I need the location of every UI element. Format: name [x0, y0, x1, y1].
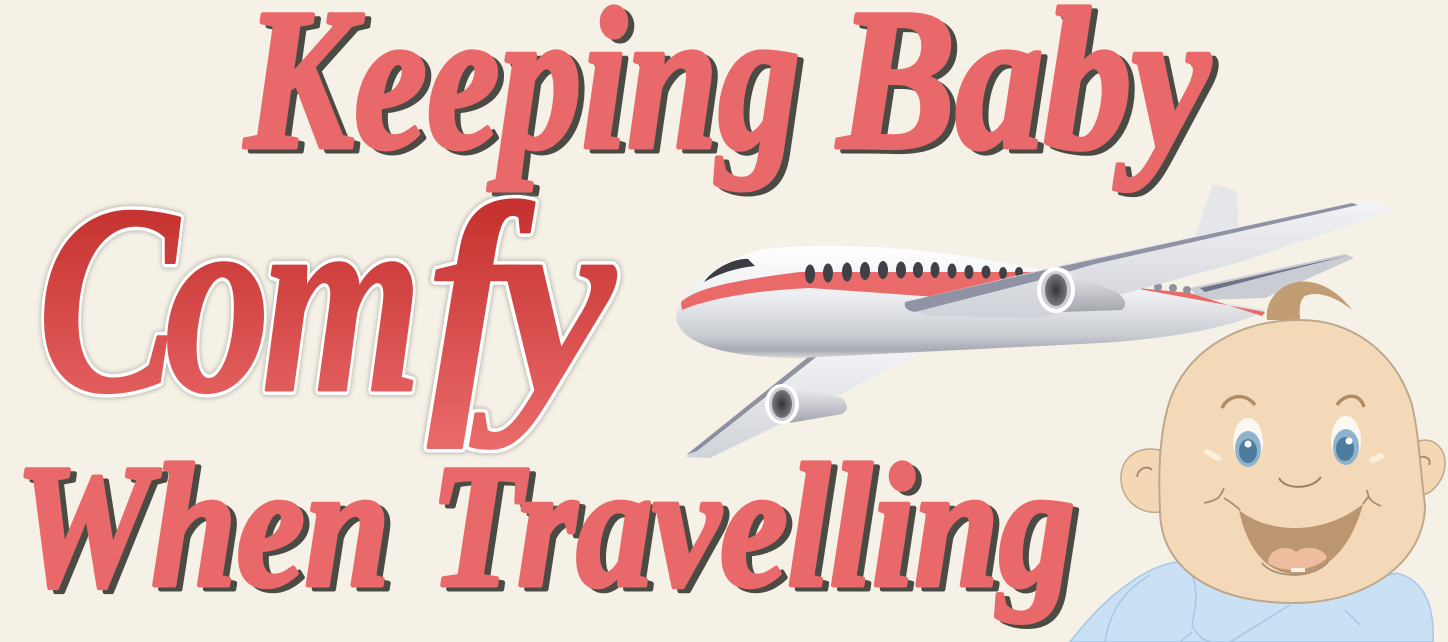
- cheek highlights: [1207, 452, 1218, 458]
- cabin windows: [805, 261, 1191, 294]
- right eye: [1331, 416, 1361, 465]
- fuselage: [676, 246, 1265, 358]
- title word: Comfy: C: [38, 150, 182, 449]
- left ear: [1121, 449, 1160, 512]
- title line: When Travelling: When: [21, 433, 396, 628]
- nose: [1279, 477, 1321, 487]
- title word: Comfy: o: [165, 150, 270, 449]
- babygrow body: [1070, 562, 1433, 642]
- left eye: [1233, 418, 1263, 467]
- title word: Comfy: f: [428, 150, 536, 449]
- cheat line: [681, 272, 1040, 310]
- cockpit window: [704, 259, 755, 282]
- near wing: [905, 202, 1394, 318]
- title word: Comfy: y: [468, 150, 617, 449]
- hair curl: [1267, 281, 1352, 320]
- title word: Comfy: m: [262, 150, 422, 449]
- title word: Comfy: C: [38, 150, 182, 449]
- title word: Comfy: f: [428, 150, 536, 449]
- near engine: [1037, 267, 1125, 313]
- title line: When Travelling: Travelling: [430, 429, 1075, 624]
- title word: Comfy: y: [468, 150, 617, 449]
- lower wing: [686, 352, 920, 458]
- title word: Comfy: m: [262, 150, 422, 449]
- tail fin: [1188, 186, 1238, 258]
- title word: Comfy: f: [428, 150, 536, 449]
- title word: Comfy: C: [38, 150, 182, 449]
- right ear: [1416, 440, 1445, 495]
- icon: airplane: [676, 186, 1394, 458]
- smile lines: [1204, 488, 1381, 575]
- icon: baby: [1070, 281, 1445, 642]
- title word: Comfy: o: [165, 150, 270, 449]
- head: [1159, 320, 1425, 603]
- mouth: [1239, 504, 1363, 574]
- eyebrows: [1222, 397, 1255, 408]
- title line: When Travelling: [15, 429, 1081, 628]
- title line: When Travelling: Travelling: [436, 433, 1081, 628]
- far tailplane: [1190, 254, 1354, 300]
- title word: Comfy: y: [468, 150, 617, 449]
- title word: Comfy: m: [262, 150, 422, 449]
- title word: Comfy: o: [165, 150, 270, 449]
- title word: Comfy: [38, 150, 617, 449]
- far engine: [765, 384, 847, 424]
- title line: When Travelling: When: [15, 429, 390, 624]
